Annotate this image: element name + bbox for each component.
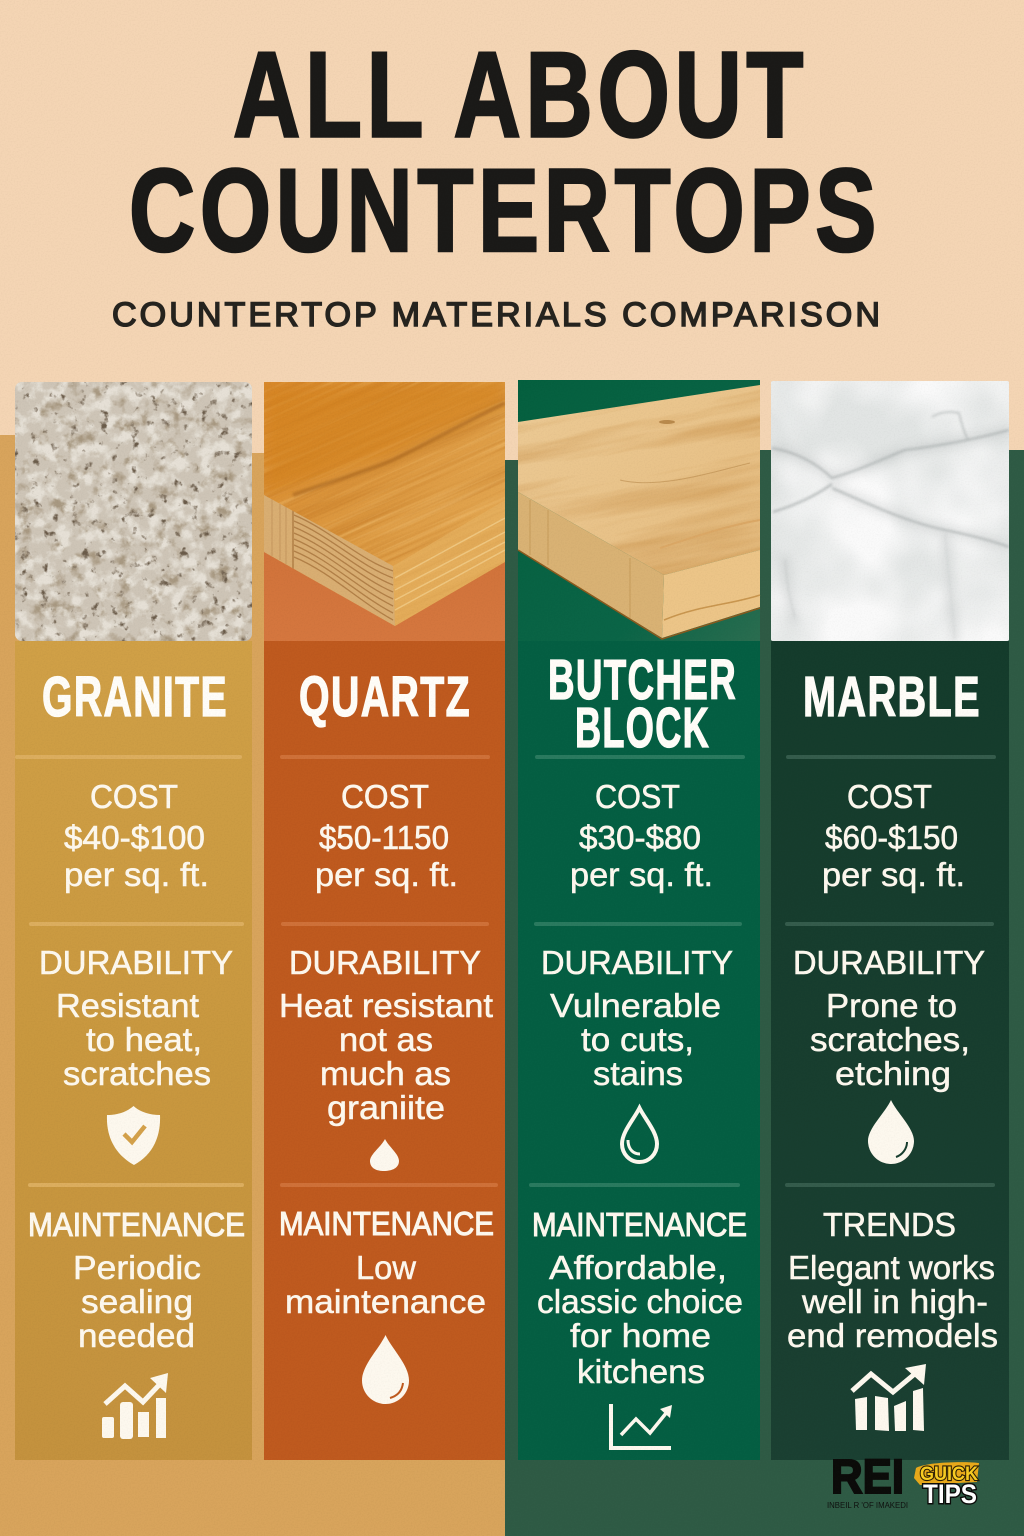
cost: butcher block: per sq. ft. — [570, 856, 713, 893]
cost: marble — [822, 778, 965, 893]
panel: granite — [15, 382, 252, 1460]
durability: granite: Resistant — [56, 987, 199, 1024]
durability: quartz — [279, 944, 493, 1126]
icon: shield with check — [107, 1106, 160, 1165]
durability: quartz: DURABILITY — [289, 944, 481, 981]
title — [129, 26, 881, 277]
durability: quartz: not as — [339, 1021, 433, 1058]
cost: granite: $40-$100 — [64, 819, 205, 856]
maintenance: granite: needed — [78, 1317, 195, 1354]
logo: REI Quick Tips: INBEIL R 'OF IMAKEDI — [827, 1501, 908, 1510]
heading: quartz: QUARTZ — [299, 665, 471, 729]
icon: line chart — [611, 1404, 672, 1448]
cost: butcher block — [570, 778, 713, 893]
cost: granite: COST — [90, 778, 178, 815]
icon: small drop — [370, 1139, 399, 1171]
heading: butcher block: BUTCHER — [548, 648, 737, 712]
subtitle: COUNTERTOP MATERIALS COMPARISON — [112, 296, 883, 334]
durability: granite: to heat, — [86, 1021, 202, 1058]
cost: granite — [64, 778, 209, 893]
trends: marble: Elegant works — [788, 1249, 995, 1286]
icon: large drop — [362, 1335, 409, 1404]
panel: quartz — [264, 382, 505, 1460]
cost: quartz: per sq. ft. — [315, 856, 458, 893]
panel: marble — [771, 381, 1009, 1460]
maintenance: granite: MAINTENANCE — [28, 1206, 245, 1243]
maintenance: granite: sealing — [81, 1283, 193, 1320]
maintenance: quartz: MAINTENANCE — [279, 1205, 494, 1242]
heading: butcher block — [548, 648, 737, 760]
durability: granite: scratches — [63, 1055, 211, 1092]
durability: quartz: much as — [320, 1055, 451, 1092]
logo: REI Quick Tips: REI — [831, 1451, 904, 1504]
cost: granite: per sq. ft. — [64, 856, 209, 893]
icon: growth chart — [102, 1373, 168, 1439]
cost: marble: per sq. ft. — [822, 856, 965, 893]
trends: marble: well in high- — [801, 1283, 988, 1320]
durability: marble — [793, 944, 985, 1092]
maintenance: quartz — [279, 1205, 494, 1320]
cost: marble: $60-$150 — [825, 819, 958, 856]
durability: quartz: graniite — [327, 1089, 445, 1126]
durability: granite: DURABILITY — [39, 944, 233, 981]
photo: butcher block slab — [518, 380, 760, 641]
durability: granite — [39, 944, 233, 1092]
maintenance: butcher block: Affordable, — [549, 1249, 727, 1286]
trends: marble: TRENDS — [823, 1206, 956, 1243]
cost: quartz — [315, 778, 458, 893]
cost: butcher block: $30-$80 — [579, 819, 701, 856]
icon: outlined drop — [622, 1108, 657, 1162]
cost: quartz: $50-1150 — [319, 819, 449, 856]
panel: butcher block — [518, 380, 760, 1460]
trends: marble — [787, 1206, 998, 1354]
durability: butcher block: stains — [593, 1055, 683, 1092]
trends: marble: end remodels — [787, 1317, 998, 1354]
cost: butcher block: COST — [595, 778, 680, 815]
maintenance: butcher block: classic choice — [537, 1283, 743, 1320]
cost: quartz: COST — [341, 778, 429, 815]
photo: granite texture — [15, 382, 252, 641]
photo: marble texture — [771, 381, 1009, 641]
durability: marble: DURABILITY — [793, 944, 985, 981]
durability: butcher block: to cuts, — [581, 1021, 694, 1058]
durability: butcher block: Vulnerable — [550, 987, 721, 1024]
maintenance: granite: Periodic — [73, 1249, 201, 1286]
maintenance: quartz: Low — [356, 1249, 416, 1286]
logo: REI Quick Tips: GUICK — [920, 1464, 978, 1485]
logo: REI Quick Tips — [827, 1451, 979, 1510]
durability: butcher block — [541, 944, 733, 1092]
maintenance: butcher block: MAINTENANCE — [532, 1206, 747, 1243]
maintenance: butcher block — [532, 1206, 747, 1390]
heading: butcher block: BLOCK — [575, 696, 710, 760]
logo: REI Quick Tips: TIPS — [923, 1479, 977, 1509]
maintenance: butcher block: kitchens — [577, 1353, 705, 1390]
durability: marble: etching — [835, 1055, 951, 1092]
icon: trend chart — [852, 1364, 926, 1431]
durability: butcher block: DURABILITY — [541, 944, 733, 981]
title: ALL ABOUT — [233, 26, 808, 162]
photo: quartz slab — [264, 382, 505, 641]
maintenance: butcher block: for home — [570, 1317, 711, 1354]
maintenance: quartz: maintenance — [285, 1283, 486, 1320]
durability: marble: scratches, — [810, 1021, 970, 1058]
maintenance: granite — [28, 1206, 245, 1354]
cost: marble: COST — [847, 778, 932, 815]
durability: marble: Prone to — [826, 987, 957, 1024]
icon: filled drop — [868, 1100, 914, 1164]
heading: granite: GRANITE — [42, 665, 228, 729]
durability: quartz: Heat resistant — [279, 987, 493, 1024]
